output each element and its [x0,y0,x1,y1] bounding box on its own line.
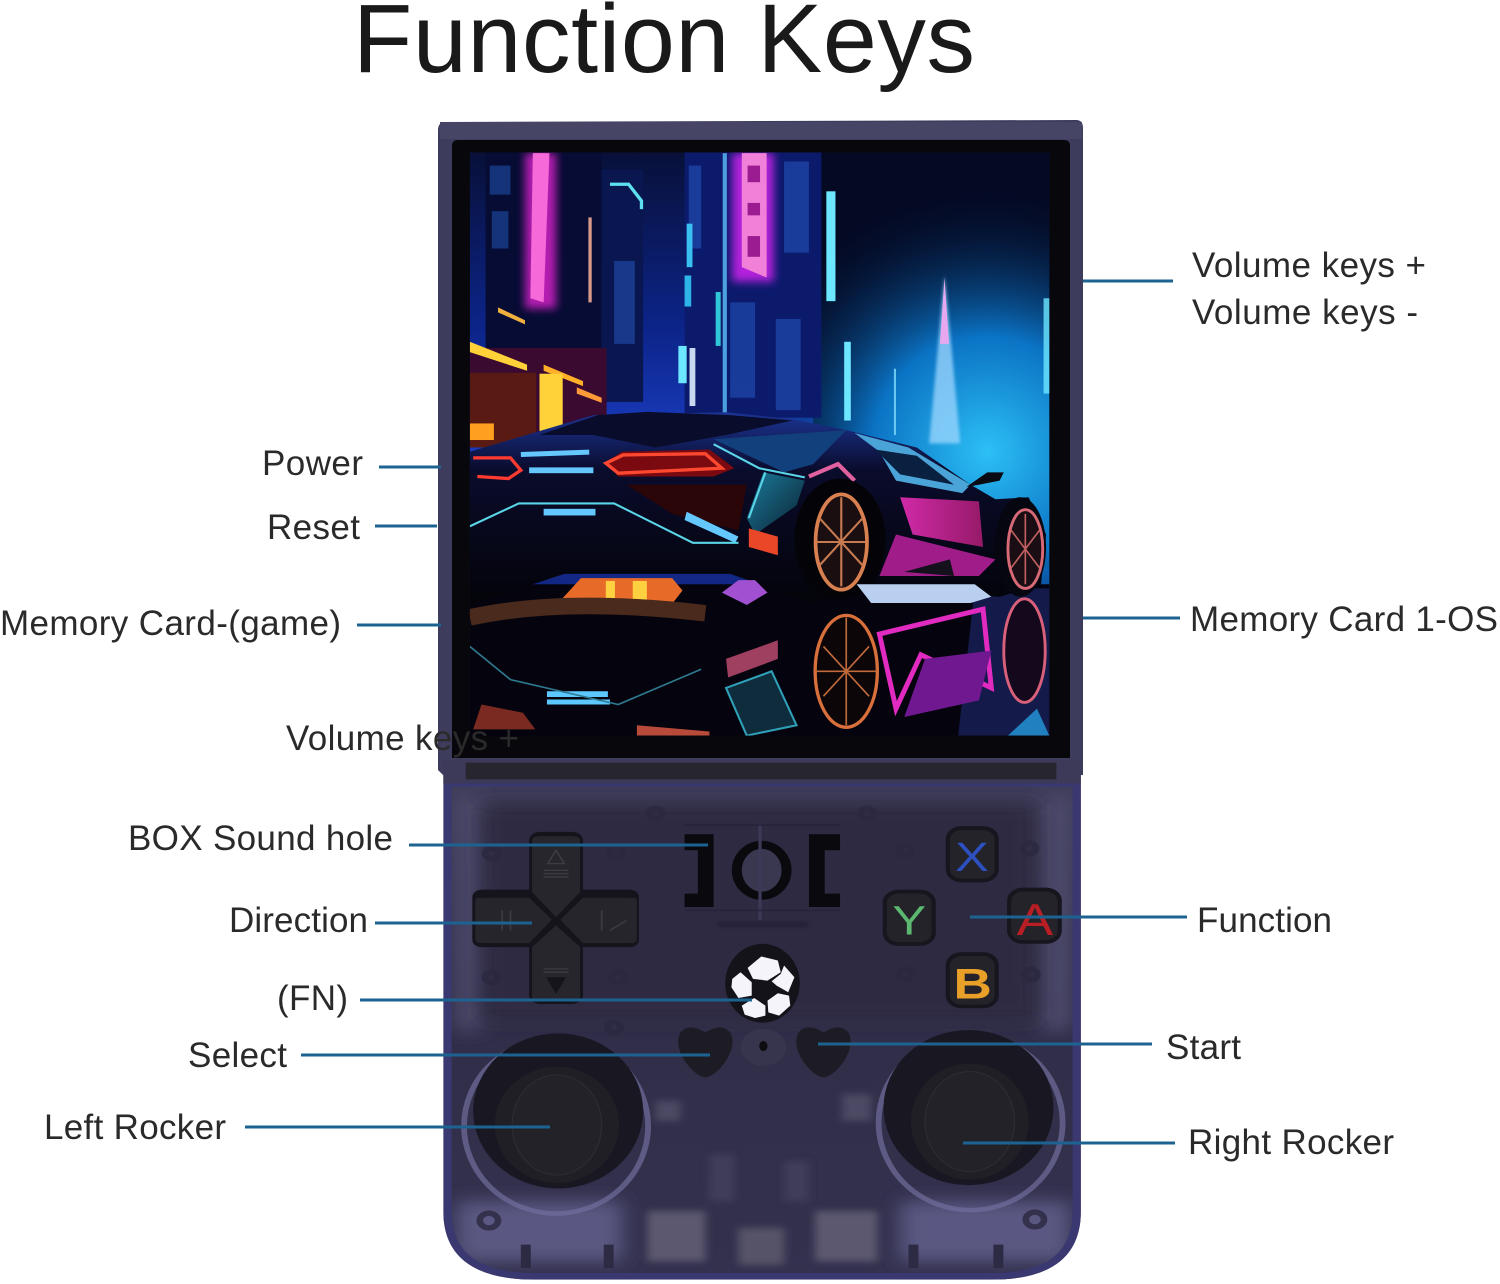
button Y [883,890,936,946]
function button: football [725,944,800,1023]
device: handheld console [438,120,1087,1281]
outer rim [443,780,1081,1280]
start heart button [796,1027,851,1077]
buildings [486,152,821,418]
translucent lighter areas [457,797,1070,1261]
neon signs [525,153,556,309]
side window [855,433,971,493]
button B [946,952,999,1008]
label: Volume keys + left: Volume keys + [286,719,519,758]
left orange storefront [470,348,607,432]
label: Start: Start [1166,1028,1241,1067]
d-pad [472,832,639,1004]
car silhouette [470,412,1046,605]
label: Left Rocker: Left Rocker [44,1108,226,1147]
button A [1007,888,1062,945]
screw posts [480,808,1044,1228]
indicator dot [741,1029,786,1066]
button X [946,826,999,882]
right rocker [879,1030,1063,1210]
label: Function: Function [1197,901,1332,940]
car roof [539,412,792,447]
speaker grille [685,823,840,927]
tail lights [606,450,734,477]
distant tower [929,275,960,443]
cyan neon lines [588,153,1049,435]
label: Reset: Reset [267,508,360,547]
button Y: Y [892,897,926,943]
button X: X [955,834,989,880]
button A: A [1017,895,1054,945]
label: (FN): (FN) [277,979,348,1018]
reflection [815,615,877,727]
left rocker [464,1033,648,1214]
port shadows [647,1094,877,1265]
select heart button [678,1027,733,1077]
label: Direction: Direction [229,901,368,940]
label: Volume keys + / - right: Volume keys - [1192,293,1418,332]
upper shell [438,120,1083,775]
under-car reflected lights [562,578,682,602]
yellow signs [470,307,602,440]
label: Memory Card-(game): Memory Card-(game) [0,604,341,643]
label: Right Rocker: Right Rocker [1188,1123,1394,1162]
shell top edge highlight [440,122,1082,139]
screen picture: neon car [470,152,1049,736]
rear wheel [794,478,886,574]
label: Select: Select [188,1036,287,1075]
blue neon strips [521,450,738,543]
rear quarter panel [747,472,805,535]
floor [470,584,1049,736]
screen bezel [452,140,1070,758]
door magenta [900,497,983,547]
button B: B [954,960,992,1008]
label: Memory Card 1-OS: Memory Card 1-OS [1190,600,1498,639]
label: Power: Power [262,444,363,483]
lower translucent shell [440,760,1087,1281]
mirror [966,472,1004,487]
bottom ticks [521,1245,1003,1268]
label: BOX Sound hole: BOX Sound hole [128,819,393,858]
front wheel [995,497,1046,597]
shell band top [443,760,1081,783]
label: Volume keys + / - right: Volume keys + [1192,246,1426,285]
label: Volume keys + / - right [1083,246,1426,332]
